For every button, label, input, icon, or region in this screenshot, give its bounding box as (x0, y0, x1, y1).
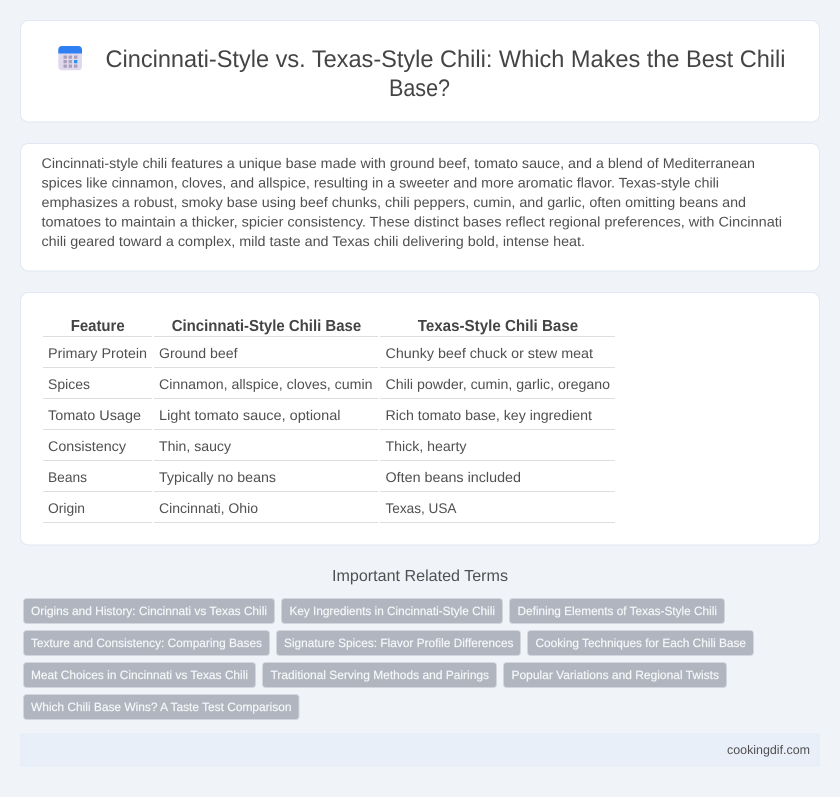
panel: title card (20, 20, 820, 122)
tag: signature spices (276, 630, 520, 656)
table row: consistency: Thin, saucy (159, 438, 231, 454)
panel: description (20, 144, 820, 271)
table row: spices: Spices (48, 376, 90, 392)
table header row: Texas-Style Chili Base (418, 318, 578, 335)
table row: tomato usage (43, 407, 615, 430)
tag: cooking techniques (528, 630, 754, 656)
table row: tomato usage: Tomato Usage (48, 407, 141, 423)
table row: origin: Texas, USA (386, 500, 457, 516)
table row: consistency (43, 438, 615, 461)
text block: description paragraph: Cincinnati-style chili features a unique base made with ground beef, tomato sauce, and a blend of Mediterranean (42, 155, 755, 171)
text block: description paragraph (42, 155, 782, 249)
tag: popular variations: Popular Variations and Regional Twists (512, 668, 719, 682)
table row: consistency: Thick, hearty (386, 438, 466, 454)
icon: calendar (58, 46, 82, 70)
tag: origins and history (24, 598, 274, 624)
tag: texture and consistency (24, 630, 270, 656)
table row: consistency: Consistency (48, 438, 126, 454)
tag: texture and consistency: Texture and Consistency: Comparing Bases (31, 636, 262, 650)
table row: spices (43, 376, 615, 399)
footer (20, 733, 820, 767)
table row: beans: Typically no beans (159, 469, 276, 485)
table header row: Cincinnati-Style Chili Base (172, 318, 361, 335)
footer: cookingdif.com (727, 743, 810, 757)
tag: which chili base wins: Which Chili Base Wins? A Taste Test Comparison (31, 700, 292, 714)
tag: which chili base wins (24, 694, 299, 720)
table header row (43, 318, 615, 337)
tag: meat choices: Meat Choices in Cincinnati vs Texas Chili (31, 668, 248, 682)
tag: key ingredients: Key Ingredients in Cincinnati-Style Chili (290, 604, 495, 618)
title (106, 46, 786, 102)
table row: primary protein: Chunky beef chuck or stew meat (386, 345, 593, 361)
table row: primary protein: Ground beef (159, 345, 238, 361)
tag: defining elements: Defining Elements of Texas-Style Chili (518, 604, 717, 618)
table row: origin: Origin (48, 500, 85, 516)
heading: important related terms: Important Related Terms (332, 568, 508, 585)
table row: beans (43, 469, 615, 492)
table row: beans: Beans (48, 469, 87, 485)
panel: comparison table (20, 292, 820, 545)
tag: signature spices: Signature Spices: Flavor Profile Differences (284, 636, 514, 650)
tag: key ingredients (282, 598, 502, 624)
tag: origins and history: Origins and History: Cincinnati vs Texas Chili (31, 604, 267, 618)
related term tags (24, 598, 754, 720)
text block: description paragraph: tomatoes to maintain a thicker, spicier consistency. These distinct bases reflect regional preferences, with Cincinnati (42, 214, 782, 230)
table row: spices: Chili powder, cumin, garlic, oregano (386, 376, 610, 392)
tag: cooking techniques: Cooking Techniques for Each Chili Base (536, 636, 746, 650)
table row: beans: Often beans included (386, 469, 521, 485)
table row: tomato usage: Rich tomato base, key ingredient (386, 407, 592, 423)
tag: traditional serving (262, 662, 496, 688)
table row: tomato usage: Light tomato sauce, optional (159, 407, 340, 423)
tag: meat choices (24, 662, 256, 688)
text block: description paragraph: spices like cinnamon, cloves, and allspice, resulting in a sweeter and more aromatic flavor. Texas-style chili (42, 174, 719, 190)
tag: popular variations (504, 662, 726, 688)
title: Cincinnati-Style vs. Texas-Style Chili: Which Makes the Best Chili (106, 46, 786, 73)
text block: description paragraph: chili geared toward a complex, mild taste and Texas chili delivering bold, intense heat. (42, 233, 585, 249)
table row: primary protein: Primary Protein (48, 345, 147, 361)
tag: traditional serving: Traditional Serving Methods and Pairings (270, 668, 489, 682)
table row: primary protein (43, 345, 615, 368)
table header row: Feature (71, 318, 125, 335)
table row: origin (43, 500, 615, 523)
title: Base? (389, 75, 450, 102)
tag: defining elements (510, 598, 724, 624)
table row: spices: Cinnamon, allspice, cloves, cumin (159, 376, 372, 392)
table row: origin: Cincinnati, Ohio (159, 500, 258, 516)
text block: description paragraph: emphasizes a robust, smoky base using beef chunks, chili peppers, cumin, and garlic, often omitting beans and (42, 194, 746, 210)
